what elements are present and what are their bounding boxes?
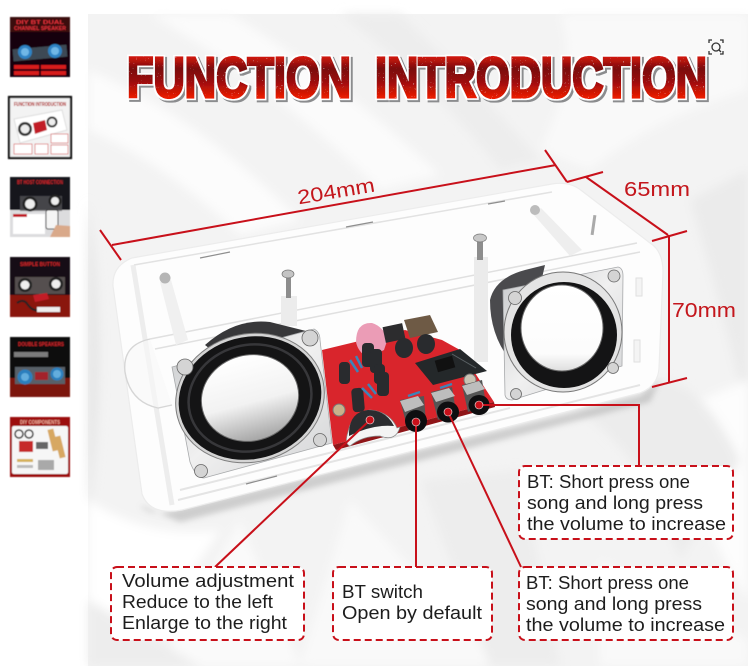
- knob switch: [400, 396, 427, 432]
- callout: BT switch: BT switch: [342, 582, 423, 602]
- title: FUNCTION: [127, 46, 351, 110]
- callout: BT lower: song and long press: [526, 594, 702, 614]
- thumbnail: dual channel speaker: CHANNEL SPEAKER: [14, 26, 66, 32]
- knob middle: [431, 387, 459, 422]
- thumbnail: function introduction, selected: FUNCTION INTRODUCTION: [14, 102, 66, 108]
- dimension: width 204mm: 204mm: [296, 175, 376, 209]
- callout: BT lower: [519, 567, 733, 640]
- bluetooth module: [415, 349, 487, 385]
- volume wheel: [346, 410, 400, 446]
- callout: BT upper: the volume to increase: [527, 514, 726, 534]
- dimension: depth 65mm: 65mm: [624, 179, 690, 201]
- dimension: width 204mm: [100, 150, 567, 260]
- speaker product: [113, 183, 663, 522]
- title: [127, 46, 707, 110]
- dimension: depth 65mm: [567, 172, 690, 235]
- callout: volume adjustment: Volume adjustment: [122, 571, 294, 591]
- callout: BT lower: BT: Short press one: [526, 573, 689, 593]
- thumbnail: DIY components: [10, 417, 70, 477]
- callout: volume adjustment: [111, 567, 304, 640]
- leader lines: [215, 405, 639, 567]
- thumbnail: double speakers: [10, 337, 70, 397]
- thumbnail: simple button: SIMPLE BUTTON: [20, 262, 60, 268]
- callout: BT upper: [519, 466, 733, 539]
- dimension: height 70mm: 70mm: [672, 300, 736, 322]
- left speaker: [161, 317, 339, 479]
- leader dots: [366, 401, 483, 426]
- thumbnail: DIY components: DIY COMPONENTS: [20, 420, 61, 426]
- dimension: height 70mm: [652, 231, 736, 387]
- callout: BT switch: Open by default: [342, 603, 482, 623]
- zoom icon: [709, 40, 723, 54]
- thumbnail: dual channel speaker: [10, 17, 70, 77]
- knob right: [462, 380, 490, 415]
- right speaker: [490, 265, 623, 400]
- circuit board: [322, 315, 495, 450]
- thumbnail strip: [9, 17, 71, 477]
- callout: volume adjustment: Reduce to the left: [122, 592, 273, 612]
- thumbnail: simple button: [10, 257, 70, 317]
- thumbnail: function introduction, selected: [9, 97, 71, 158]
- back posts and screws: [160, 205, 596, 362]
- thumbnail: BT connection: BT HOST CONNECTION: [17, 180, 63, 186]
- acrylic enclosure: [113, 183, 663, 511]
- thumbnail: double speakers: DOUBLE SPEAKERS: [18, 342, 64, 348]
- audio jack: [356, 323, 388, 358]
- callout: BT lower: the volume to increase: [526, 615, 725, 635]
- callout: BT switch: [333, 567, 492, 640]
- thumbnail: dual channel speaker: DIY BT DUAL: [16, 20, 64, 26]
- enclosure shadow: [140, 380, 660, 522]
- callout: BT upper: song and long press: [527, 493, 703, 513]
- thumbnail: BT connection: [10, 177, 70, 237]
- callout: volume adjustment: Enlarge to the right: [122, 613, 287, 633]
- callout: BT upper: BT: Short press one: [527, 472, 690, 492]
